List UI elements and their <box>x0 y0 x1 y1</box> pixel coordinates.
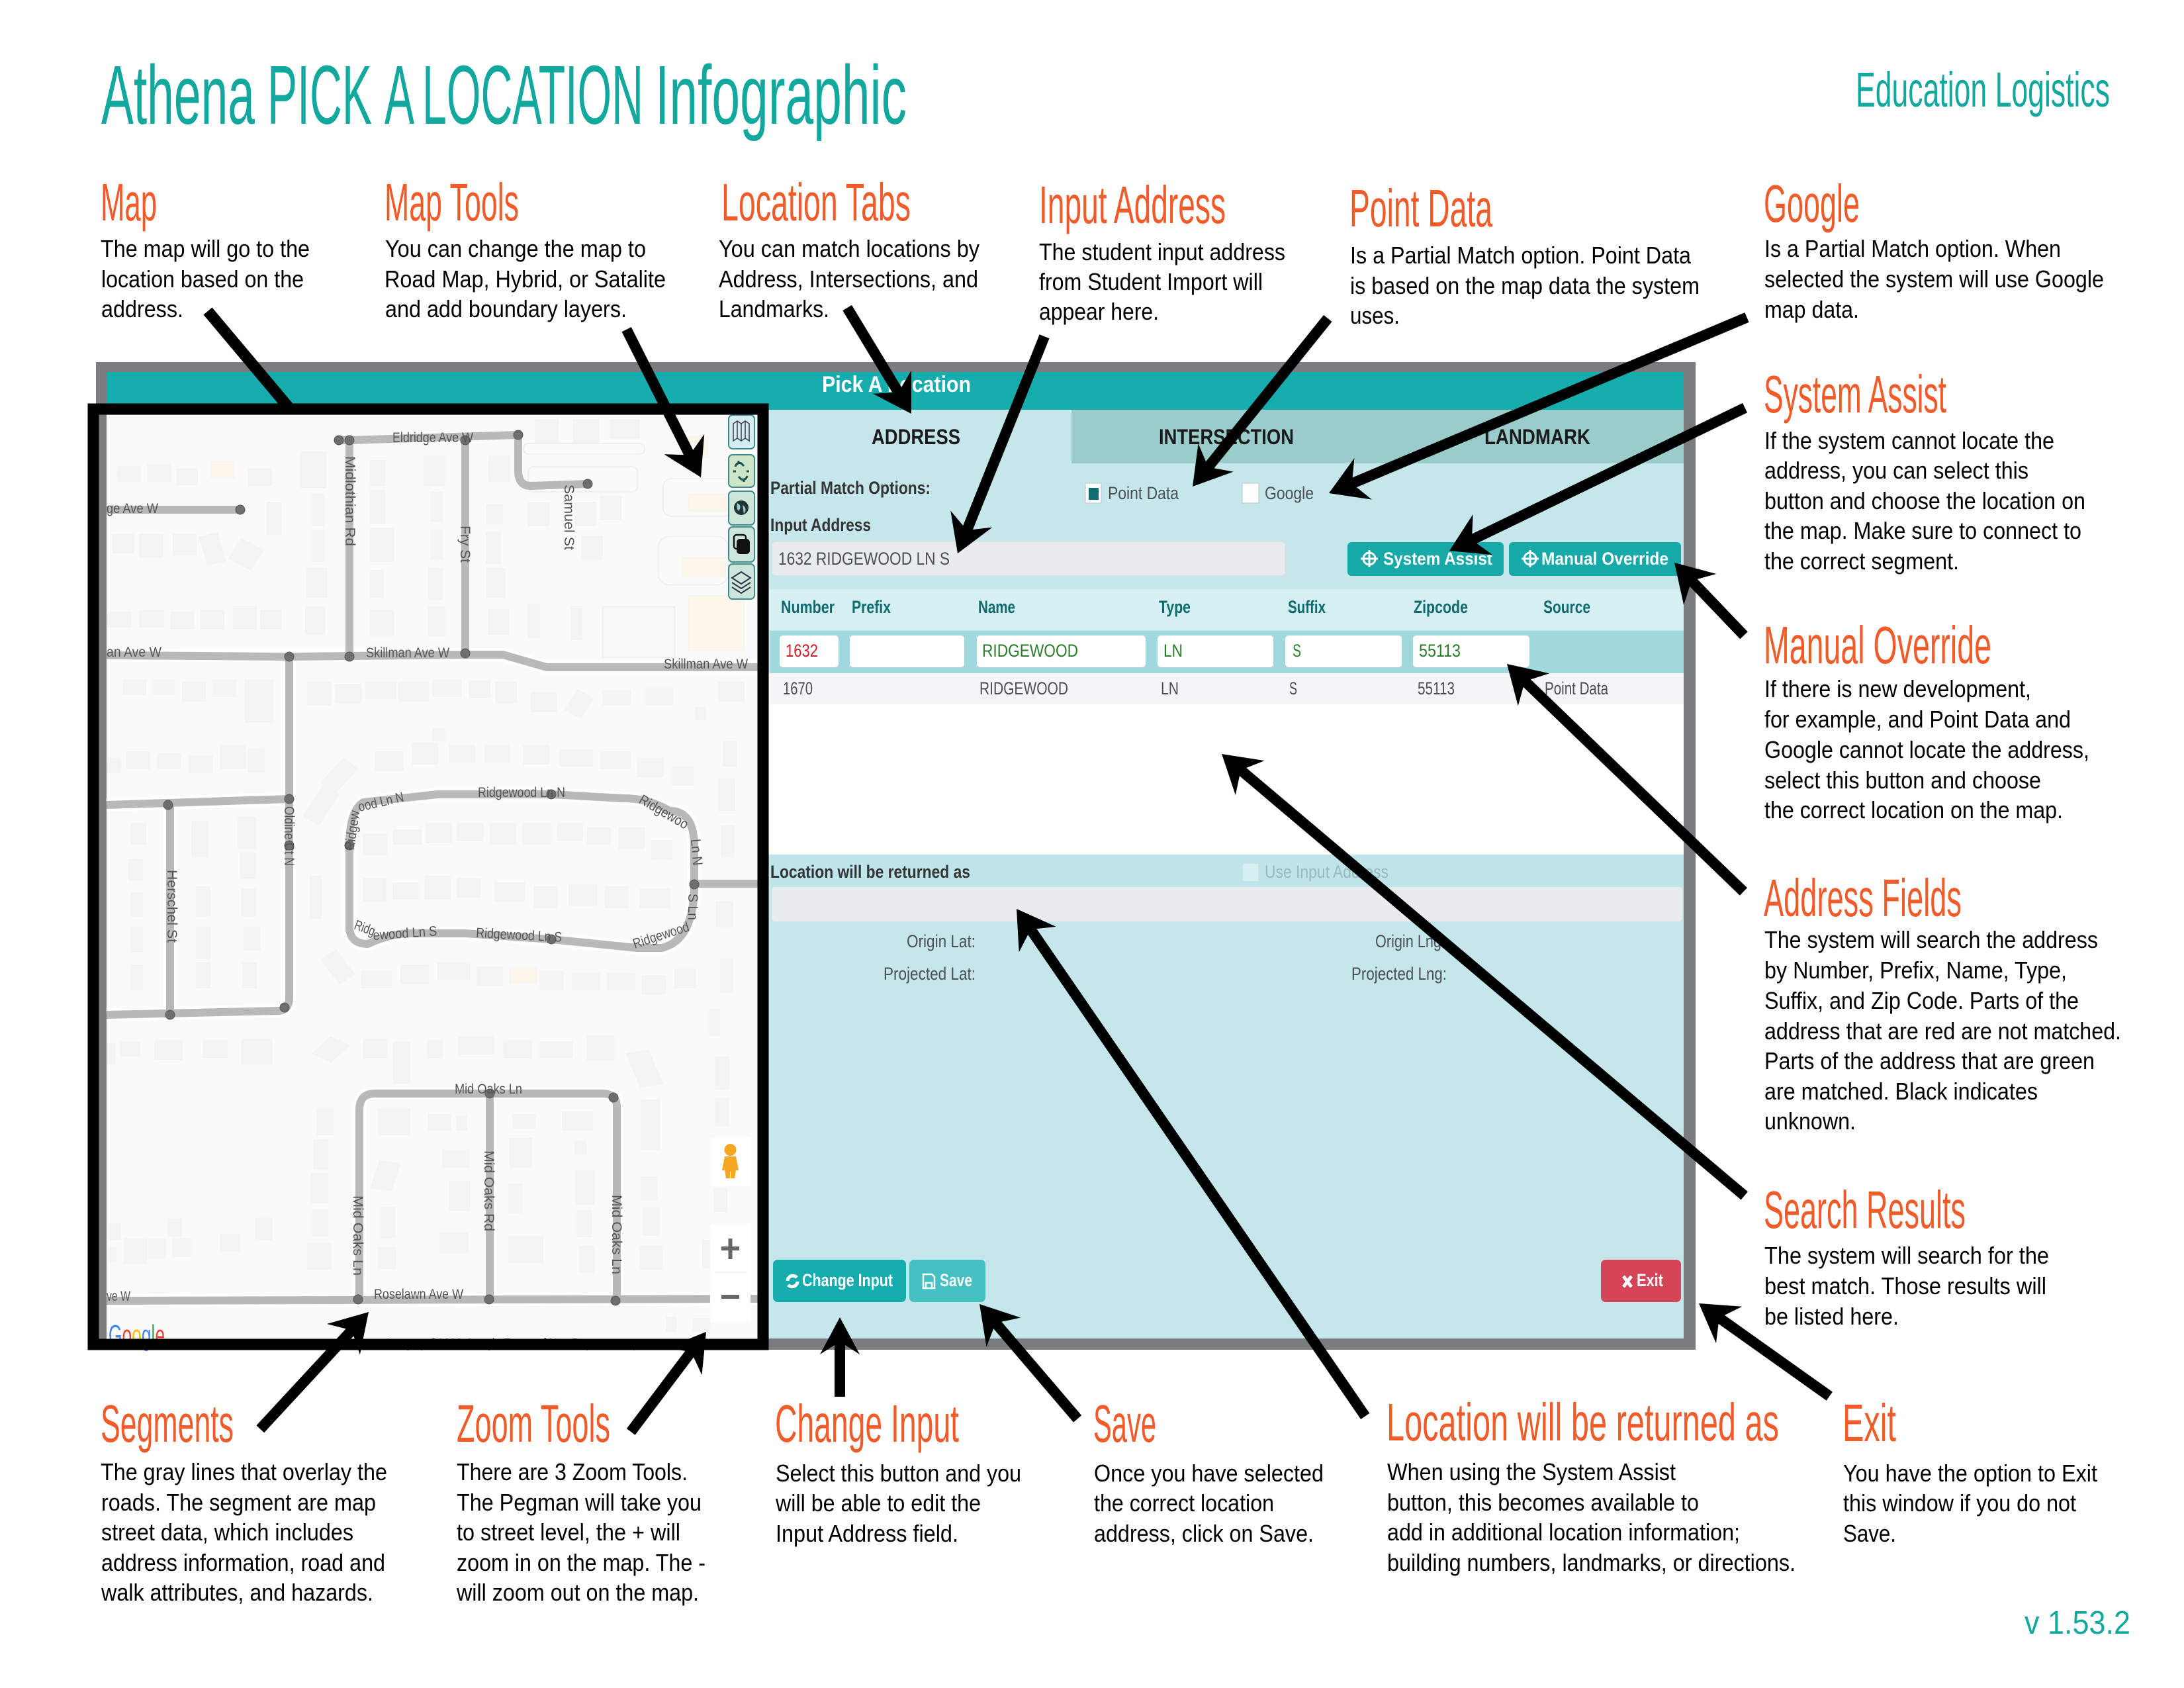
text block: System Assist: address, you can select this <box>1764 457 2028 484</box>
text block: Manual Override <box>1764 616 2089 823</box>
title <box>101 48 907 142</box>
text block: Map: The map will go to the <box>101 235 310 262</box>
text block: Point Data: Is a Partial Match option. Point Data <box>1350 242 1692 269</box>
text block: Location Tabs: You can match locations by <box>719 235 979 262</box>
text block: Change Input: Select this button and you <box>776 1460 1021 1487</box>
title: A <box>385 48 414 142</box>
arrow: Map Tools <box>606 319 721 487</box>
search results: LN <box>1161 679 1179 698</box>
text block: Address Fields: Parts of the address that are green <box>1764 1047 2095 1074</box>
street labels: Skillman Ave W <box>664 657 748 672</box>
text block: Input Address: The student input address <box>1039 238 1285 265</box>
google logo: Google <box>109 1319 165 1352</box>
address fields table: Source <box>1543 597 1590 617</box>
road segments <box>107 430 758 1305</box>
header bar: Pick A Location <box>822 372 971 397</box>
text block: Manual Override: for example, and Point Data and <box>1764 706 2071 733</box>
text block: Zoom Tools: There are 3 Zoom Tools. <box>457 1458 688 1485</box>
text block: Zoom Tools: to street level, the + will <box>457 1519 680 1546</box>
text block: Point Data: uses. <box>1350 302 1400 329</box>
arrow: Zoom Tools <box>613 1319 724 1445</box>
street labels: ewood Ln S <box>373 923 437 943</box>
text block: Location Tabs: Address, Intersections, and <box>719 265 978 293</box>
text block: System Assist: button and choose the location on <box>1764 487 2085 514</box>
text block: Search Results <box>1764 1180 2049 1330</box>
save button <box>909 1260 985 1302</box>
partial match options <box>770 478 1314 503</box>
text block: Manual Override: If there is new development, <box>1764 675 2031 702</box>
address fields table: Name <box>978 597 1015 617</box>
arrow: Save <box>962 1289 1095 1433</box>
text block: Google <box>1764 174 2104 323</box>
location tabs: INTERSECTION <box>1159 425 1294 449</box>
text block: Map Tools: and add boundary layers. <box>385 295 627 322</box>
panel: Pick A Location screenshot <box>96 362 1696 1350</box>
text block: Segments <box>101 1394 387 1606</box>
text block: Google: Google <box>1764 174 1860 233</box>
text block: Point Data: Point Data <box>1349 179 1492 238</box>
search results <box>768 673 1684 855</box>
map buildings upper <box>108 420 745 994</box>
text block: Change Input: Change Input <box>775 1394 959 1453</box>
partial match options: Google <box>1265 483 1314 503</box>
text block: Segments: The gray lines that overlay the <box>101 1458 387 1485</box>
address fields table: Zipcode <box>1414 597 1468 617</box>
location will be returned as section: Projected Lng: <box>1351 964 1447 984</box>
street labels: Mid Oaks Ln <box>455 1082 522 1097</box>
text block: Location will be returned as: button, this becomes available to <box>1387 1489 1699 1516</box>
system assist button: System Assist <box>1383 549 1492 569</box>
text block: Segments: address information, road and <box>101 1549 385 1576</box>
location will be returned as section: Location will be returned as <box>770 862 970 882</box>
street labels: Roselawn Ave W <box>374 1287 463 1302</box>
text block: Save: Once you have selected <box>1094 1460 1324 1487</box>
panel frame <box>96 362 1696 1350</box>
text block: Address Fields: Suffix, and Zip Code. Parts of the <box>1764 987 2079 1014</box>
change input button <box>773 1260 906 1302</box>
text block: Zoom Tools: The Pegman will take you <box>457 1489 702 1516</box>
icon: layers <box>732 572 751 593</box>
text block: Search Results: be listed here. <box>1764 1303 1899 1330</box>
arrow: Location Tabs <box>828 296 931 426</box>
map attribution: Imagery ©2020 Google Terms of Use Report a map error <box>387 1336 665 1351</box>
text block: Segments: street data, which includes <box>101 1519 353 1546</box>
text block: Search Results: best match. Those results will <box>1764 1272 2046 1299</box>
search results: S <box>1289 679 1297 698</box>
text block: Location will be returned as: When using the System Assist <box>1387 1458 1676 1485</box>
arrow: Location will be returned as <box>998 896 1384 1429</box>
text block: System Assist: If the system cannot locate the <box>1764 427 2054 454</box>
street labels: Ridgewood Ln N <box>478 785 565 800</box>
text block: Exit <box>1843 1393 2097 1547</box>
street labels: Ridg <box>352 917 377 939</box>
text block: Map Tools: You can change the map to <box>385 235 646 262</box>
text block: Zoom Tools: zoom in on the map. The - <box>457 1549 705 1576</box>
arrow: Map <box>208 311 291 410</box>
address fields table: LN <box>1163 641 1183 661</box>
map buildings lower <box>108 1009 729 1332</box>
address fields table: Number <box>781 597 835 617</box>
location will be returned as section: Origin Lat: <box>907 931 976 951</box>
manual override button: Manual Override <box>1541 549 1668 569</box>
street labels: Skillman Ave W <box>366 645 449 661</box>
street labels: Midlothian Rd <box>342 456 357 546</box>
partial match options: Point Data <box>1108 483 1179 503</box>
street labels: ood Ln N <box>357 790 405 815</box>
address fields table: RIDGEWOOD <box>982 641 1078 661</box>
location tabs: ADDRESS <box>872 425 960 449</box>
arrow: Segments <box>244 1297 385 1444</box>
title: PICK <box>267 48 372 142</box>
text block: Address Fields <box>1764 868 2121 1135</box>
text block: Location Tabs: Landmarks. <box>719 295 829 322</box>
arrow: Address Fields <box>1491 648 1759 908</box>
text block: Address Fields: address that are red are not matched. <box>1764 1017 2121 1045</box>
street labels: ve W <box>107 1289 130 1304</box>
text block: Map Tools <box>385 173 666 322</box>
input address field <box>770 515 1285 576</box>
text block: Map Tools: Map Tools <box>385 173 519 232</box>
icon: map <box>733 421 749 441</box>
icon: broken link <box>733 461 749 482</box>
street labels <box>107 430 748 1304</box>
text block: Google: Is a Partial Match option. When <box>1764 235 2061 262</box>
text block: Location will be returned as <box>1387 1393 1796 1576</box>
input address field: 1632 RIDGEWOOD LN S <box>778 549 950 569</box>
text block: Input Address: Input Address <box>1039 175 1226 234</box>
text block: Zoom Tools: will zoom out on the map. <box>456 1579 699 1606</box>
text block: Zoom Tools: Zoom Tools <box>457 1394 610 1453</box>
text block: Manual Override: Google cannot locate the address, <box>1764 736 2089 763</box>
street labels: Ridgewood Ln S <box>476 925 563 945</box>
text block: Change Input: Input Address field. <box>776 1520 958 1547</box>
input address field: Input Address <box>770 515 871 535</box>
text block: Map <box>101 173 310 322</box>
arrow: System Assist <box>1439 388 1754 571</box>
address fields table: Type <box>1159 597 1191 617</box>
icon: overlapping squares <box>734 535 749 553</box>
text block: Address Fields: The system will search the address <box>1764 926 2098 953</box>
arrow: Exit <box>1686 1285 1843 1415</box>
text block: Search Results: Search Results <box>1764 1180 1966 1239</box>
street labels: Mid Oaks Rd <box>481 1150 496 1231</box>
text block: Change Input: will be able to edit the <box>775 1489 981 1517</box>
text block: Google: selected the system will use Google <box>1764 265 2104 293</box>
street labels: Ridgewood <box>631 919 691 952</box>
address fields table: S <box>1293 641 1301 661</box>
address fields table: Prefix <box>852 597 891 617</box>
text block: Search Results: The system will search for the <box>1764 1242 2049 1269</box>
icon: globe <box>734 500 749 515</box>
text block: Location will be returned as: building numbers, landmarks, or directions. <box>1387 1549 1796 1576</box>
exit button <box>1601 1260 1681 1302</box>
text block: Segments: Segments <box>101 1394 234 1453</box>
search results: 1670 <box>783 679 813 698</box>
arrow: Search Results <box>1207 737 1759 1213</box>
street labels: Ridgewoo <box>637 792 691 832</box>
save button: Save <box>940 1270 972 1290</box>
text block: Location Tabs <box>719 173 979 322</box>
text block: Google: map data. <box>1764 296 1859 323</box>
text block: Zoom Tools <box>456 1394 705 1606</box>
version number: v 1.53.2 <box>2025 1605 2130 1641</box>
exit button: Exit <box>1637 1270 1663 1290</box>
panel background <box>107 372 1684 1338</box>
street labels: Mid Oaks Ln <box>350 1196 365 1276</box>
street labels: an Ave W <box>107 645 161 660</box>
text block: Map: address. <box>101 295 183 322</box>
address fields table: 1632 <box>786 641 818 661</box>
text block: Point Data <box>1349 179 1700 329</box>
system assist button <box>1347 542 1504 576</box>
street labels: Herschel St <box>164 870 179 943</box>
street labels: Eldridge Ave W <box>392 430 473 445</box>
street labels: Mid Oaks Ln <box>609 1195 624 1274</box>
text block: Map: Map <box>101 173 157 232</box>
map highlight border <box>93 409 763 1344</box>
text block: Input Address: appear here. <box>1039 298 1159 325</box>
text block: Segments: walk attributes, and hazards. <box>101 1579 373 1606</box>
text block: Exit: You have the option to Exit <box>1843 1460 2097 1487</box>
location will be returned as section: Use Input Address <box>1265 862 1388 882</box>
pegman street view <box>710 1137 751 1186</box>
title: LOCATION <box>422 48 643 142</box>
map <box>107 415 758 1352</box>
change input button: Change Input <box>802 1270 893 1290</box>
street labels: Ln N <box>688 838 705 866</box>
text block: Address Fields: Address Fields <box>1764 868 1962 927</box>
text block: Location will be returned as: add in additional location information; <box>1387 1519 1740 1546</box>
street labels: Ridgew <box>342 809 363 851</box>
text block: Manual Override: Manual Override <box>1764 616 1991 675</box>
text block: Map Tools: Road Map, Hybrid, or Satalite <box>385 265 666 293</box>
manual override button <box>1509 542 1681 576</box>
segment nodes <box>163 430 699 1305</box>
text block: Location will be returned as: Location will be returned as <box>1387 1393 1779 1452</box>
location will be returned as section: Projected Lat: <box>884 964 976 984</box>
arrow: Change Input <box>820 1317 860 1397</box>
location will be returned as section: Origin Lng: <box>1375 931 1445 951</box>
text block: Segments: roads. The segment are map <box>101 1489 376 1516</box>
text block: Address Fields: by Number, Prefix, Name, Type, <box>1764 957 2067 984</box>
street labels: ge Ave W <box>107 501 158 516</box>
title: Infographic <box>655 48 907 142</box>
text block: Address Fields: are matched. Black indicates <box>1764 1078 2038 1105</box>
text block: Save <box>1093 1394 1324 1547</box>
text block: Address Fields: unknown. <box>1764 1107 1856 1135</box>
arrow: Google <box>1320 297 1756 514</box>
arrow: Manual Override <box>1658 547 1760 651</box>
text block: Input Address <box>1039 175 1285 325</box>
street labels: Samuel St <box>561 485 576 550</box>
text block: Manual Override: the correct location on the map. <box>1764 796 2063 823</box>
text block: Save: the correct location <box>1094 1489 1274 1517</box>
text block: Location Tabs: Location Tabs <box>721 173 911 232</box>
text block: System Assist: System Assist <box>1764 365 1946 424</box>
map tools toolbar <box>729 415 754 599</box>
address fields table: Suffix <box>1288 597 1326 617</box>
text block: Exit: this window if you do not <box>1843 1489 2076 1517</box>
text block: Save: address, click on Save. <box>1094 1520 1314 1547</box>
zoom tools <box>710 1224 751 1322</box>
address fields table <box>768 589 1684 673</box>
address fields table: 55113 <box>1419 641 1461 661</box>
text block: Exit: Exit <box>1843 1393 1896 1452</box>
search results: RIDGEWOOD <box>979 679 1068 698</box>
search results: 55113 <box>1418 679 1455 698</box>
header bar <box>107 372 1684 410</box>
text block: Exit: Save. <box>1843 1520 1896 1547</box>
text block: Map: location based on the <box>101 265 304 293</box>
arrow: Point Data <box>1175 305 1345 500</box>
text block: System Assist: the correct segment. <box>1764 547 1959 575</box>
arrow: Input Address <box>936 328 1066 562</box>
location tabs: LANDMARK <box>1484 425 1590 449</box>
street labels: Oldine Ct N <box>281 806 296 866</box>
title: Athena <box>101 48 255 142</box>
location tabs <box>872 410 1684 463</box>
location will be returned as section <box>768 855 1684 984</box>
text block: Point Data: is based on the map data the system <box>1350 272 1700 299</box>
street labels: S Ln <box>685 894 700 920</box>
partial match options: Partial Match Options: <box>770 478 931 498</box>
text block: Input Address: from Student Import will <box>1039 268 1263 295</box>
text block: Change Input <box>775 1394 1021 1547</box>
text block: System Assist: the map. Make sure to connect to <box>1764 517 2081 544</box>
search results: Point Data <box>1545 679 1609 698</box>
text block: Save: Save <box>1093 1394 1156 1453</box>
text block: Manual Override: select this button and choose <box>1764 767 2041 794</box>
street labels: Fry St <box>457 526 473 563</box>
text block: System Assist <box>1764 365 2085 575</box>
